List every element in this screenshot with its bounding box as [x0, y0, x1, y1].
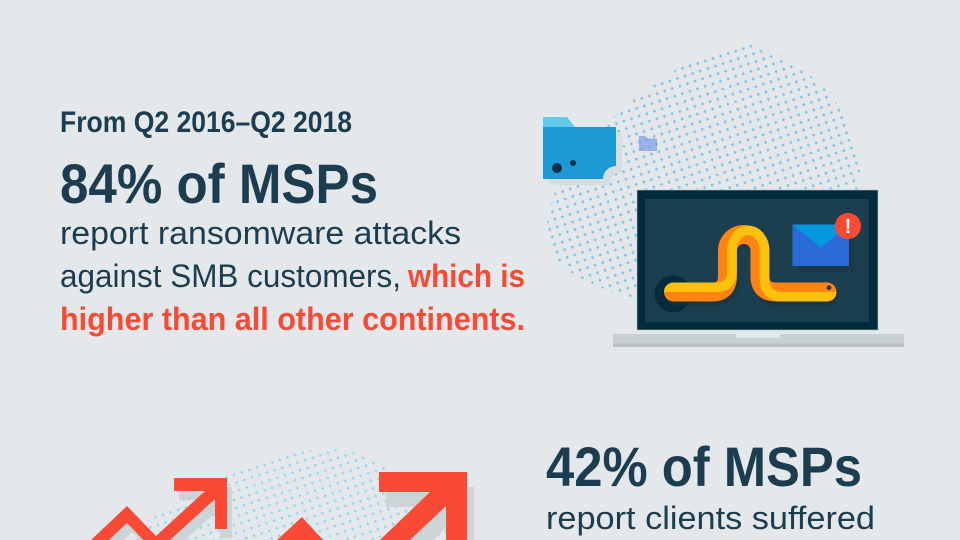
body line 1: report ransomware attacks [60, 215, 461, 251]
laptop screen bezel [637, 190, 878, 330]
icon: folder [543, 117, 622, 185]
laptop base [613, 334, 904, 347]
text block: ransomware statistic [60, 106, 525, 337]
icon: alert badge: ! [845, 216, 851, 238]
body line: report clients suffered [546, 500, 875, 536]
dotted blob behind arrows [120, 449, 450, 540]
date range heading: From Q2 2016–Q2 2018 [60, 106, 352, 139]
chart: large rising arrow [277, 472, 474, 540]
dotted blob behind laptop [547, 45, 861, 300]
body line 2 highlight: which is [407, 258, 525, 294]
headline 42% of MSPs: 42% of MSPs [546, 435, 862, 498]
icon: small faded folder [639, 136, 657, 151]
chart: small rising arrow [91, 478, 232, 540]
body line 3 highlight: higher than all other continents. [60, 301, 525, 337]
worm [664, 230, 837, 302]
text block: clients statistic [546, 435, 875, 536]
worm hole [654, 276, 692, 312]
icon: envelope [792, 224, 854, 271]
laptop screen [645, 199, 869, 322]
headline 84% of MSPs: 84% of MSPs [60, 152, 378, 215]
laptop [613, 190, 904, 347]
icon: alert badge [835, 213, 861, 239]
body line 2: against SMB customers, [60, 258, 401, 294]
